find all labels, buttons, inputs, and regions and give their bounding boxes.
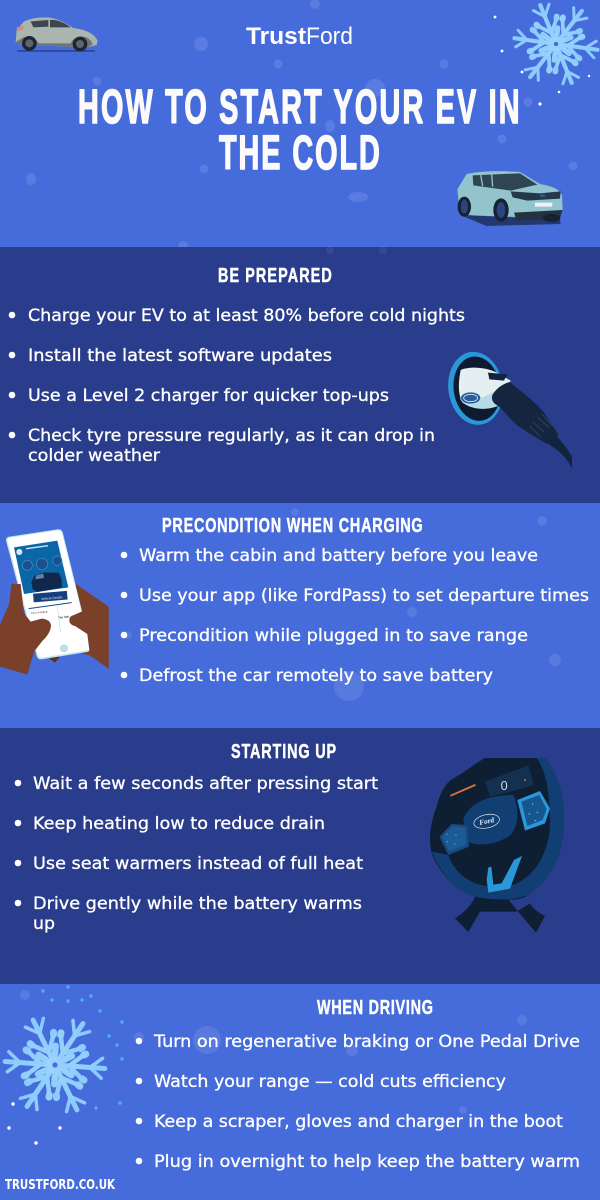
- panel: starting up: [0, 728, 600, 984]
- heading: STARTING UP: [231, 740, 336, 763]
- icon: teal SUV: [457, 171, 563, 226]
- bullet list: colder weather: [28, 446, 161, 466]
- bullet list: up: [33, 914, 55, 934]
- heading: WHEN DRIVING: [317, 996, 433, 1019]
- bullet list: Use seat warmers instead of full heat: [33, 854, 363, 874]
- logo: TrustFord: TrustFord: [246, 23, 353, 50]
- bullet list: Wait a few seconds after pressing start: [33, 774, 378, 794]
- bullet list: Check tyre pressure regularly, as it can drop in: [28, 426, 435, 446]
- bullet list: Defrost the car remotely to save battery: [139, 666, 493, 686]
- bullet list: Keep heating low to reduce drain: [33, 814, 325, 834]
- footer url: TRUSTFORD.CO.UK: [5, 1178, 116, 1193]
- icon: hand holding phone: [0, 529, 109, 675]
- bullet list: [121, 546, 589, 686]
- bullet list: Charge your EV to at least 80% before cold nights: [28, 306, 465, 326]
- bullet list: [136, 1032, 580, 1172]
- icon: hand holding phone: You last: [58, 614, 69, 620]
- heading: BE PREPARED: [218, 264, 332, 287]
- title: THE COLD: [219, 127, 380, 180]
- panel: be prepared: [0, 246, 600, 503]
- bullet list: Warm the cabin and battery before you leave: [139, 546, 538, 566]
- panel: header: [0, 0, 600, 251]
- icon: snowflake top right: [497, 0, 600, 103]
- panel: when driving: [0, 984, 600, 1200]
- bullet list: [15, 774, 378, 934]
- bullet list: Precondition while plugged in to save range: [139, 626, 528, 646]
- bullet list: Use a Level 2 charger for quicker top-ups: [28, 386, 389, 406]
- bullet list: Plug in overnight to help keep the battery warm: [154, 1152, 580, 1172]
- bullet list: [9, 306, 465, 466]
- bullet list: Watch your range — cold cuts efficiency: [154, 1072, 506, 1092]
- icon: snowflake bottom left: [0, 996, 124, 1134]
- title: HOW TO START YOUR EV IN: [78, 81, 520, 134]
- snow dots: [7, 985, 124, 1145]
- heading: PRECONDITION WHEN CHARGING: [162, 514, 423, 537]
- title: [78, 81, 520, 180]
- panel: precondition when charging: [0, 503, 600, 728]
- icon: steering wheel: [430, 758, 564, 933]
- bullet list: Keep a scraper, gloves and charger in the boot: [154, 1112, 563, 1132]
- icon: steering wheel: 0: [501, 779, 508, 793]
- icon: grey car: [16, 17, 98, 51]
- bullet list: Use your app (like FordPass) to set departure times: [139, 586, 589, 606]
- bullet list: Drive gently while the battery warms: [33, 894, 362, 914]
- snow dots top right: [494, 16, 590, 106]
- icon: charging plug: [443, 348, 572, 469]
- icon: hand holding phone: Find charging: [31, 609, 48, 615]
- icon: hand holding phone: Vehicle Details: [41, 595, 63, 601]
- icon: steering wheel: Ford: [478, 815, 495, 827]
- bullet list: Install the latest software updates: [28, 346, 332, 366]
- bullet list: Turn on regenerative braking or One Pedal Drive: [153, 1032, 580, 1052]
